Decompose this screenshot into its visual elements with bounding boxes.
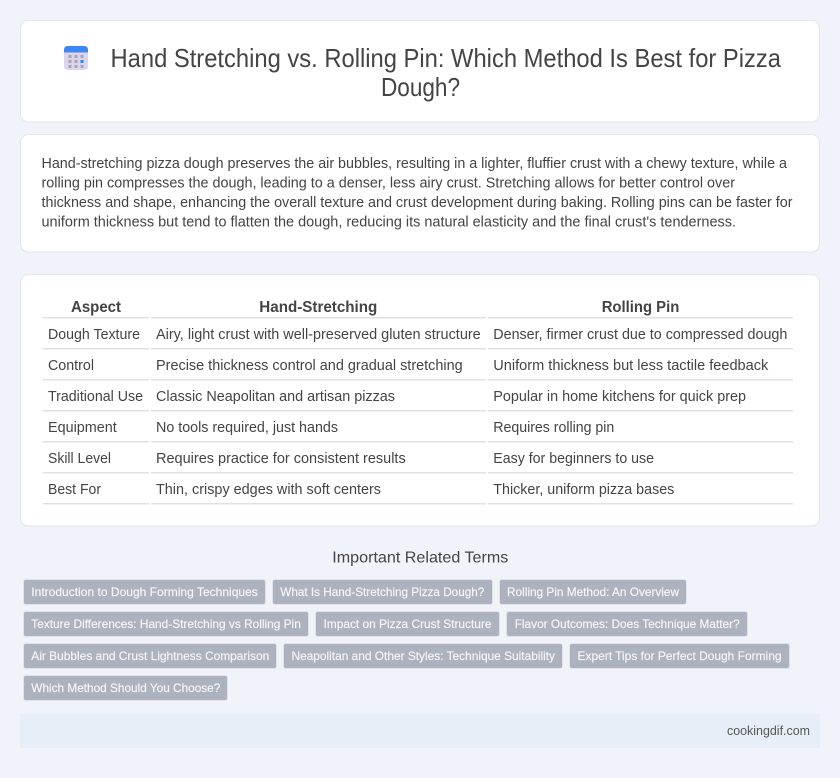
tag [570,644,790,668]
panel: title [20,20,820,122]
table row: skill level: Skill Level [48,451,111,467]
table header [43,299,793,318]
table row: traditional use: Popular in home kitchens for quick prep [493,389,746,405]
related terms tags [24,580,790,700]
table row: equipment: No tools required, just hands [156,420,338,436]
table row: control: Precise thickness control and gradual stretching [156,358,463,374]
table row: traditional use: Traditional Use [48,389,143,405]
table row: dough texture: Denser, firmer crust due to compressed dough [493,327,787,343]
panel: comparison table [20,274,820,526]
text block: summary: Hand-stretching pizza dough preserves the air bubbles, resulting in a lighter, fluffier crust with a chewy texture, while a [42,156,787,172]
heading: Dough? [381,74,460,102]
tag [316,612,500,636]
tag: Rolling Pin Method: An Overview [507,585,679,599]
table header: Rolling Pin [602,299,679,316]
table row: skill level: Requires practice for consistent results [156,451,406,467]
footer source text: cookingdif.com [727,723,810,738]
tag [24,644,276,668]
tag [24,612,308,636]
tag [24,580,266,604]
panel: summary paragraph [20,134,820,252]
table row: best for: Best For [48,482,101,498]
tag [506,612,748,636]
tag [24,676,228,700]
tag [500,580,686,604]
tag: Neapolitan and Other Styles: Technique Suitability [292,649,555,663]
heading [110,45,782,102]
table row: equipment: Requires rolling pin [493,420,614,436]
table header: Aspect [71,299,122,316]
text block: summary: uniform thickness but tend to flatten the dough, reducing its natural elasticity and the final crust's tenderness. [42,214,736,230]
table row: skill level [43,451,793,474]
table row: traditional use: Classic Neapolitan and artisan pizzas [156,389,395,405]
text block: summary [42,156,793,230]
tag: What Is Hand-Stretching Pizza Dough? [280,585,485,599]
tag: Air Bubbles and Crust Lightness Comparison [31,649,269,663]
tag: Impact on Pizza Crust Structure [324,617,492,631]
table header: Hand-Stretching [259,299,377,316]
tag: Flavor Outcomes: Does Technique Matter? [515,617,740,631]
table row: dough texture: Airy, light crust with well-preserved gluten structure [156,327,481,343]
tag: Introduction to Dough Forming Techniques [31,585,258,599]
footer bar [20,714,820,748]
table row: skill level: Easy for beginners to use [493,451,654,467]
table row: best for [43,482,793,504]
table row: control: Control [48,358,94,374]
table row: best for: Thicker, uniform pizza bases [493,482,674,498]
tag: Texture Differences: Hand-Stretching vs Rolling Pin [31,617,301,631]
table row: control [43,358,793,380]
table row: best for: Thin, crispy edges with soft centers [156,482,381,498]
tag [272,580,492,604]
heading: related terms: Important Related Terms [332,550,508,566]
table row: dough texture: Dough Texture [48,327,140,343]
table row: control: Uniform thickness but less tactile feedback [493,358,769,374]
text block: summary: rolling pin compresses the dough, leading to a denser, less airy crust. Stretching allows for better control over [42,176,735,192]
table row: equipment [43,420,793,442]
tag: Which Method Should You Choose? [31,681,221,695]
text block: summary: thickness and shape, enhancing the overall texture and crust development during baking. Rolling pins can be faster for [42,195,793,211]
tag [284,644,562,668]
icon: calendar grid [64,46,88,70]
table row: equipment: Equipment [48,420,117,436]
table row: dough texture [43,327,793,350]
heading: Hand Stretching vs. Rolling Pin: Which Method Is Best for Pizza [110,45,782,73]
table row: traditional use [43,389,793,412]
tag: Expert Tips for Perfect Dough Forming [578,649,782,663]
